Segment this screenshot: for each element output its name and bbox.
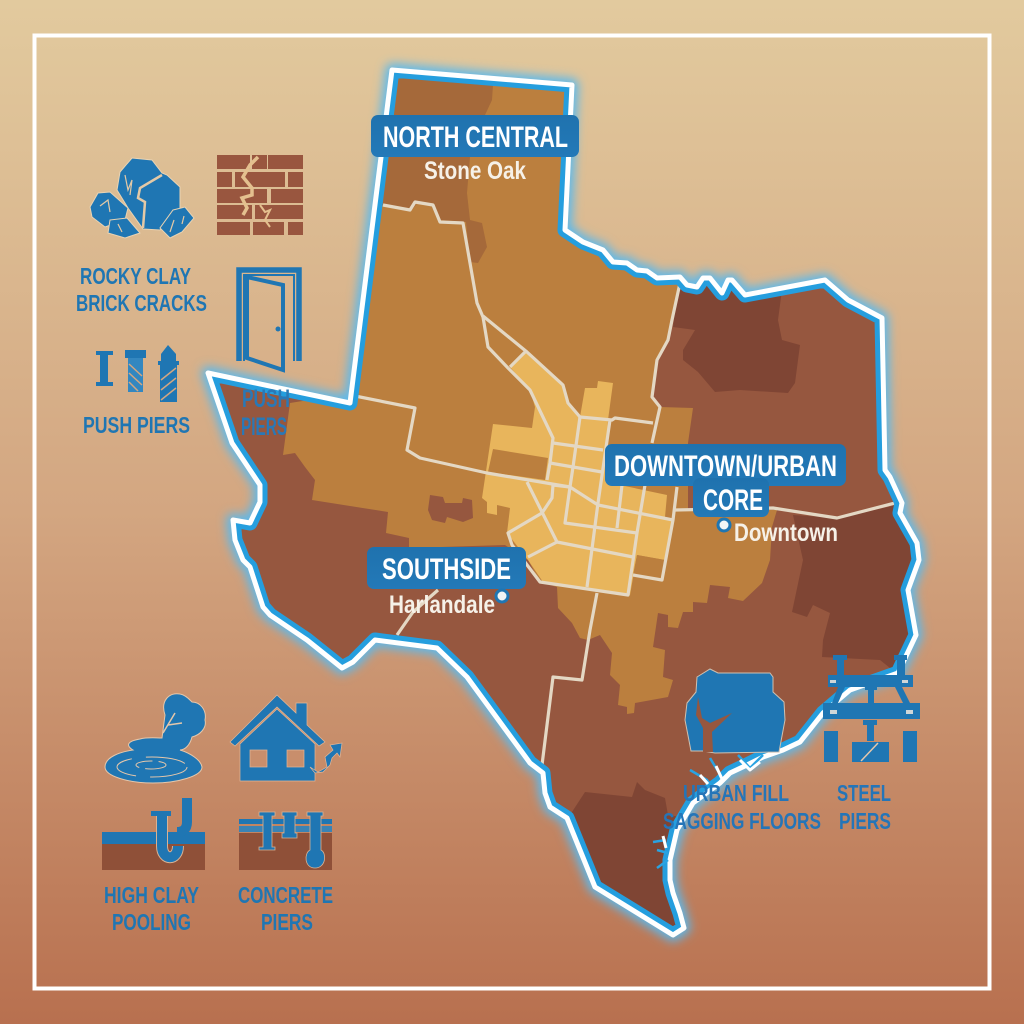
caption: push piers: PUSH PIERS: [83, 412, 190, 438]
caption: steel piers: PIERS: [839, 808, 891, 834]
label: Southside: [367, 547, 526, 619]
caption: overlapping push pier: PIERS: [241, 413, 287, 441]
caption: steel piers: STEEL: [837, 780, 891, 806]
icon: cracked brick wall: [217, 155, 303, 235]
state outline: inner blue band: [208, 70, 919, 935]
icon: push piers: [96, 345, 179, 402]
caption: rocky clay, brick cracks: [76, 263, 207, 316]
regions: [200, 60, 930, 950]
icon: house with crack: [230, 695, 342, 781]
caption: overlapping push pier: PUSH: [242, 385, 290, 413]
caption: high clay pooling: [104, 882, 199, 935]
caption: urban fill, sagging floors: URBAN FILL: [683, 780, 789, 806]
state outline: white line: [208, 70, 919, 935]
label: Downtown/Urban Core: [605, 444, 846, 547]
icon: concrete piers: [239, 812, 332, 870]
label: Southside: Harlandale: [389, 591, 495, 619]
caption: steel piers: [837, 780, 891, 834]
icon: sagging house fill: [685, 669, 785, 753]
caption: concrete piers: CONCRETE: [238, 882, 333, 908]
road network: [350, 202, 895, 765]
label: North Central: Stone Oak: [424, 157, 526, 185]
caption: high clay pooling: POOLING: [112, 909, 191, 935]
label: North Central: [371, 115, 579, 185]
icon: pooling water: [105, 694, 205, 783]
icon: rocky clay: [90, 158, 194, 238]
caption: rocky clay, brick cracks: ROCKY CLAY: [80, 263, 191, 289]
caption: urban fill, sagging floors: SAGGING FLOORS: [663, 808, 821, 834]
caption: overlapping push pier: [241, 385, 290, 441]
caption: concrete piers: PIERS: [261, 909, 313, 935]
caption: high clay pooling: HIGH CLAY: [104, 882, 199, 908]
caption: concrete piers: [238, 882, 333, 935]
map of Texas: [200, 60, 930, 950]
icon: door frame: [239, 270, 299, 370]
label: Southside: SOUTHSIDE: [382, 553, 511, 586]
icon: steel piers: [823, 655, 920, 762]
label: Downtown/Urban Core: DOWNTOWN/URBAN: [614, 450, 837, 483]
label: Downtown/Urban Core: Downtown: [734, 519, 838, 547]
caption: urban fill, sagging floors: [663, 780, 821, 834]
icon: drain pipe: [102, 798, 205, 870]
outline glow: [208, 70, 919, 935]
caption: rocky clay, brick cracks: BRICK CRACKS: [76, 290, 207, 316]
label: North Central: NORTH CENTRAL: [383, 121, 568, 154]
coastal inlets: [653, 755, 763, 868]
label: Downtown/Urban Core: CORE: [703, 484, 763, 517]
